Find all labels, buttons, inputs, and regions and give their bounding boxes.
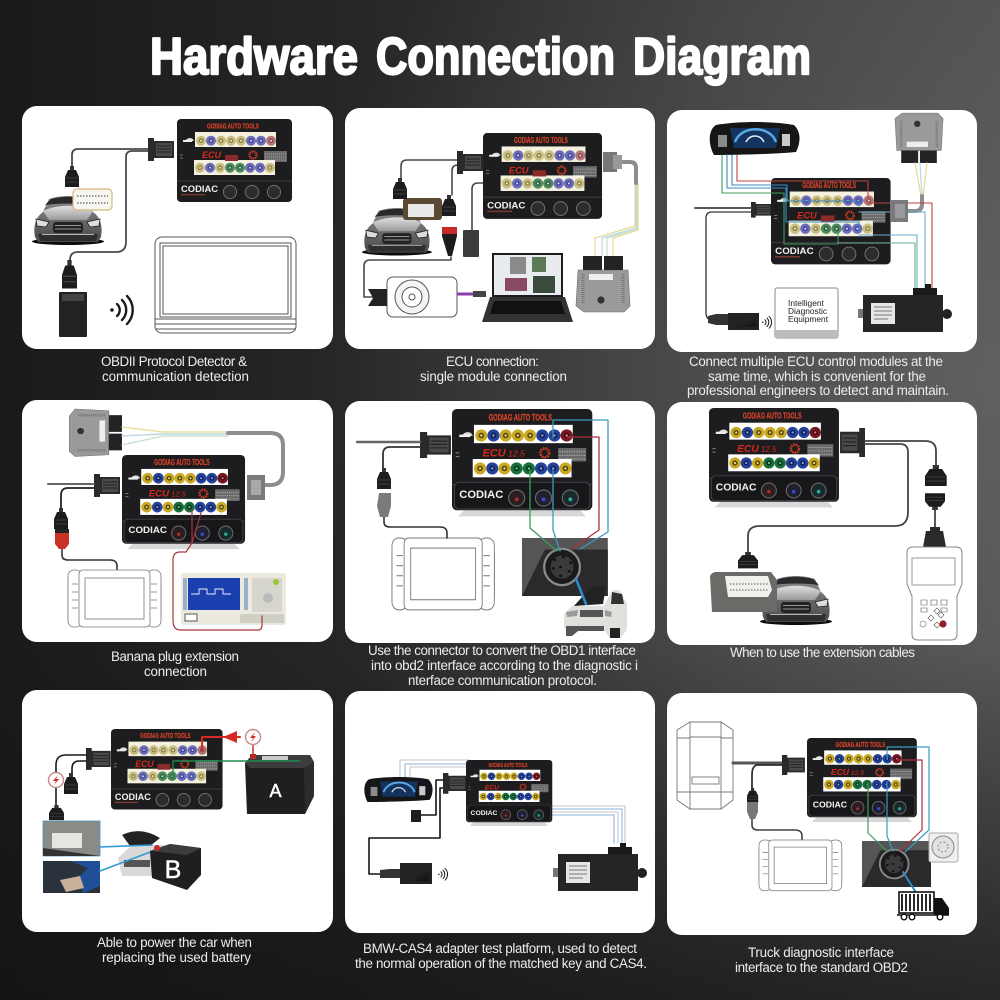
icon: DB connector down: [923, 527, 946, 547]
icon: truck: [897, 892, 949, 920]
icon: wireless: [438, 868, 448, 880]
pale wires to ECU: [915, 163, 927, 196]
icon: connector: [247, 475, 265, 500]
icon: USB plug: [473, 291, 486, 297]
device: GODIAG breakout box: ECU: [149, 489, 170, 500]
device: GODIAG breakout box: 12.5: [851, 770, 864, 777]
panel: banana plug extension: [22, 400, 333, 642]
title: Diagram: [633, 28, 811, 86]
icon: DB connector: [148, 138, 174, 161]
icon: wireless: [762, 316, 772, 328]
title: [150, 28, 811, 86]
device: GODIAG breakout box: ECU: [483, 448, 507, 460]
caption: ECU connection: [420, 354, 567, 384]
caption: banana plug: connection: [144, 664, 207, 679]
icon: plugs: [393, 178, 456, 216]
device: GODIAG breakout box: GODIAG AUTO TOOLS: [488, 763, 528, 769]
panel: ECU single module: [345, 108, 655, 349]
icon: lightning left: [48, 772, 64, 788]
device: GODIAG breakout box: [466, 760, 552, 826]
icon: gray plug: [747, 802, 758, 819]
device: GODIAG breakout box: [709, 408, 839, 507]
icon: diagnostic equipment: Diagnostic: [788, 306, 827, 316]
icon: wireless: [110, 296, 133, 324]
cables: [48, 484, 117, 570]
device: GODIAG breakout box: [483, 133, 602, 219]
icon: OBD plugs: [738, 465, 947, 568]
gray cable: [905, 196, 922, 211]
gray cable: [622, 162, 636, 183]
panel: BMW CAS4: [345, 691, 655, 933]
icon: DB connector: [420, 432, 451, 458]
icon: SUV: [564, 586, 627, 638]
icon: CAS module: [858, 284, 952, 332]
icon: DB connector: [840, 428, 865, 457]
icon: OBD plug: [747, 788, 758, 803]
pale wires: [122, 427, 228, 445]
icon: connector: [890, 200, 908, 222]
icon: DB connector: [94, 474, 120, 497]
device: GODIAG breakout box: GODIAG AUTO TOOLS: [140, 731, 191, 740]
icon: connector: [603, 152, 622, 172]
icon: DB connector: [443, 773, 466, 794]
icon: handheld scanner: [907, 547, 962, 640]
device: GODIAG breakout box: ECU: [831, 767, 850, 777]
icon: terminal: [250, 754, 256, 759]
cables: [364, 160, 483, 297]
icon: tablet outline: [155, 237, 296, 333]
icon: connector inset: [929, 833, 958, 862]
photo: OBD port: [43, 821, 100, 856]
panel: OBDII protocol detector: [22, 106, 333, 349]
device: GODIAG breakout box: GODIAG AUTO TOOLS: [154, 458, 210, 467]
device: GODIAG breakout box: 12.5: [508, 449, 525, 459]
panel: truck diagnostic: [667, 693, 977, 935]
panel: battery replacement: [22, 690, 333, 932]
icon: red adapter: [55, 529, 69, 549]
icon: dongle: [708, 313, 759, 330]
icon: gray plug: [377, 493, 391, 517]
device: GODIAG breakout box: CODIAC: [813, 800, 847, 810]
device: GODIAG breakout box: [122, 455, 245, 549]
gray cable: [228, 433, 283, 485]
device: GODIAG breakout box: GODIAG AUTO TOOLS: [514, 136, 568, 145]
icon: dashboard cluster: [710, 122, 800, 155]
caption: OBDII: communication detection: [102, 369, 249, 384]
device: GODIAG breakout box: CODIAC: [459, 489, 503, 501]
device: GODIAG breakout box: CODIAC: [128, 525, 167, 536]
icon: oscilloscope: [181, 573, 286, 625]
caption: extension cables: When to use the extension cables: [730, 645, 915, 660]
icon: CAS module: [553, 843, 647, 891]
panel: multiple ECU modules: [667, 110, 977, 352]
icon: ECU: [895, 113, 943, 163]
icon: ECU: [576, 256, 630, 312]
caption: BMW CAS4: the normal operation of the matched key and CAS4.: [355, 956, 647, 971]
icon: DB connector: [86, 748, 111, 770]
icon: DB connector: [751, 202, 771, 218]
icon: OBD port photo: [403, 198, 442, 220]
pale wires to ECU: [595, 183, 638, 256]
icon: OBD port bubble: [73, 189, 112, 210]
icon: diagnostic equipment: [775, 288, 838, 338]
device: GODIAG breakout box: ECU: [797, 211, 817, 221]
red lead to battery: [252, 744, 254, 755]
caption: OBDII: OBDII Protocol Detector &: [101, 354, 247, 369]
device: GODIAG breakout box: GODIAG AUTO TOOLS: [802, 181, 856, 190]
device: GODIAG breakout box: 12.5: [761, 445, 777, 454]
device: GODIAG breakout box: ECU: [509, 165, 529, 175]
cables: [369, 780, 443, 874]
green lead: [173, 761, 300, 777]
device: GODIAG breakout box: CODIAC: [470, 810, 498, 817]
icon: diagnostic equipment: Equipment: [788, 314, 829, 324]
device: GODIAG breakout box: GODIAG AUTO TOOLS: [836, 740, 885, 749]
icon: dongle: [380, 863, 432, 884]
icon: car: [362, 208, 432, 256]
icon: laptop: [482, 253, 573, 322]
icon: car open hood: [118, 831, 172, 876]
caption: OBD1 conversion: nterface communication protocol.: [408, 673, 597, 688]
icon: white programmer: [368, 277, 457, 317]
caption: multiple ECU: [687, 354, 949, 398]
icon: lightning right: [246, 730, 260, 744]
device: GODIAG breakout box: [177, 119, 292, 202]
device: GODIAG breakout box: CODIAC: [716, 482, 757, 493]
device: GODIAG breakout box: CODIAC: [775, 246, 814, 256]
purple cable: [457, 292, 473, 296]
icon: diagnostic equipment: Intelligent: [788, 298, 825, 308]
caption: OBDII: [101, 354, 249, 384]
device: GODIAG breakout box: ECU: [202, 150, 222, 160]
caption: BMW CAS4: BMW-CAS4 adapter test platform, used to detect: [363, 941, 637, 956]
caption: multiple ECU: same time, which is convenient for the: [708, 369, 926, 384]
wiring: [530, 420, 608, 604]
cables: [357, 442, 447, 538]
device: GODIAG breakout box: [771, 178, 891, 264]
device: GODIAG breakout box: ECU: [135, 759, 154, 769]
icon: dashboard cluster: [364, 777, 433, 802]
device: GODIAG breakout box: 12.5: [171, 490, 187, 499]
blue jumper leads: [100, 845, 153, 871]
caption: battery: Able to power the car when: [97, 935, 252, 950]
device: GODIAG breakout box: GODIAG AUTO TOOLS: [207, 122, 259, 130]
icon: DB connector: [782, 755, 805, 775]
icon: battery B: [150, 844, 201, 890]
icon: battery A: [245, 755, 314, 814]
icon: connector photo: [862, 841, 931, 887]
icon: VCI adapter: [59, 292, 87, 337]
device: GODIAG breakout box: CODIAC: [181, 184, 219, 194]
icon: connector photo: [522, 538, 608, 596]
caption: banana plug: [111, 649, 239, 679]
icon: plugs: [49, 773, 78, 820]
cables: [70, 149, 148, 260]
cables: [56, 755, 86, 806]
cables: [733, 763, 802, 841]
icon: OBD plug lower: [62, 260, 77, 289]
caption: battery: [97, 935, 252, 965]
caption: ECU connection: ECU connection:: [446, 354, 539, 369]
device: GODIAG breakout box: [452, 409, 592, 516]
icon: OBD port photo: [710, 572, 777, 612]
icon: DB connector: [457, 151, 483, 174]
device: GODIAG breakout box: GODIAG AUTO TOOLS: [489, 413, 552, 423]
caption: banana plug: Banana plug extension: [111, 649, 239, 664]
icon: OBD plug: [377, 468, 391, 489]
icon: OBD plug upper: [65, 166, 79, 187]
caption: battery: replacing the used battery: [102, 950, 251, 965]
icon: scan tablet: [68, 570, 161, 627]
pale wires: [400, 760, 625, 843]
photo: mechanic: [43, 861, 100, 893]
red lead: [202, 737, 240, 750]
wiring: [722, 155, 932, 290]
cables: [748, 441, 936, 553]
caption: truck: interface to the standard OBD2: [735, 960, 908, 975]
caption: OBD1 conversion: into obd2 interface according to the diagnostic i: [371, 658, 638, 673]
caption: multiple ECU: Connect multiple ECU control modules at the: [689, 354, 943, 369]
icon: car: [32, 196, 104, 245]
panel: extension cables: [667, 402, 977, 645]
title: Connection: [376, 28, 615, 86]
device: GODIAG breakout box: [111, 729, 223, 810]
cables: [695, 208, 751, 320]
icon: plug: [411, 810, 421, 822]
device: GODIAG breakout box: ECU: [737, 444, 759, 455]
icon: battery A: A: [269, 781, 282, 801]
icon: battery B: B: [165, 856, 181, 884]
icon: scan tablet: [759, 840, 842, 891]
caption: truck: [735, 945, 908, 975]
caption: ECU connection: single module connection: [420, 369, 567, 384]
caption: BMW CAS4: [355, 941, 647, 971]
caption: OBD1 conversion: Use the connector to convert the OBD1 interface: [368, 643, 636, 658]
device: GODIAG breakout box: CODIAC: [115, 792, 152, 802]
caption: OBD1 conversion: [368, 643, 638, 688]
caption: multiple ECU: professional engineers to detect and maintain.: [687, 383, 949, 398]
icon: dongle: [463, 230, 479, 257]
red probe cable: [173, 510, 262, 630]
caption: truck: Truck diagnostic interface: [748, 945, 894, 960]
panel: OBD1 to OBD2: [345, 401, 655, 643]
device: GODIAG breakout box: ECU: [485, 784, 500, 791]
icon: red OBD adapter: [442, 227, 457, 256]
arrow: [223, 731, 237, 743]
device: GODIAG breakout box: GODIAG AUTO TOOLS: [743, 411, 802, 421]
icon: VCI outline: [677, 722, 733, 809]
wiring: [868, 747, 929, 891]
device: GODIAG breakout box: [807, 738, 917, 822]
icon: ECU: [69, 409, 122, 457]
device: GODIAG breakout box: CODIAC: [487, 201, 526, 211]
title: Hardware: [150, 28, 358, 86]
icon: scan tablet: [392, 538, 494, 610]
icon: OBD plug: [54, 508, 68, 529]
icon: car: [760, 576, 832, 625]
